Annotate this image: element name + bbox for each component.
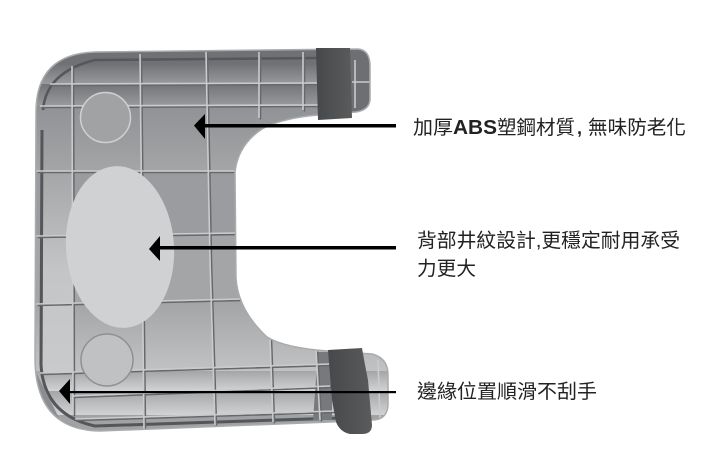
arrow: back pattern: [149, 236, 396, 261]
oval pad: [60, 162, 180, 332]
arrow: edge: [59, 379, 396, 404]
text: material: [413, 117, 686, 139]
strap top: [316, 48, 352, 120]
text: material: ,: [577, 118, 582, 138]
arrow: material: [194, 114, 396, 139]
circular recess top: [80, 92, 130, 142]
text: back pattern: 背部井紋設計,更穩定耐用承受: [417, 230, 680, 252]
text: material: 無味防老化: [588, 117, 686, 139]
text: material: 塑鋼材質: [497, 117, 575, 139]
circular recess bottom: [81, 334, 133, 386]
strap bottom: [328, 348, 372, 434]
text: back pattern: 力更大: [417, 258, 476, 280]
text: edge: 邊緣位置順滑不刮手: [417, 381, 597, 403]
text: back pattern: [417, 230, 680, 280]
text: material: ABS: [453, 117, 497, 139]
text: material: 加厚: [413, 117, 453, 139]
tray: [30, 45, 395, 440]
